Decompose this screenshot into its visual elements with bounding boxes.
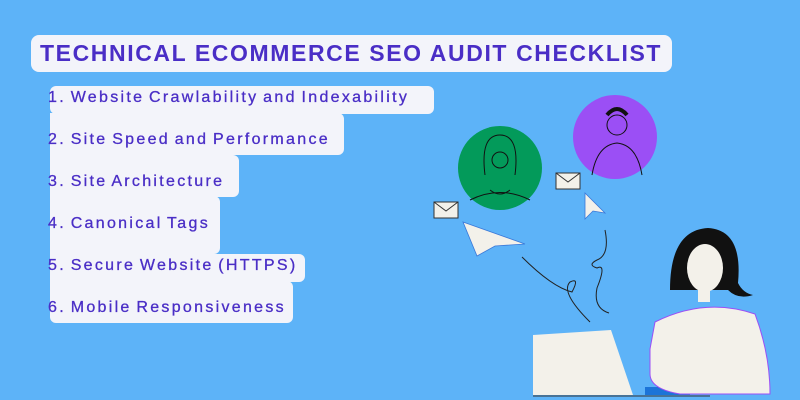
item 4: 4. Canonical Tags — [48, 215, 210, 232]
item 1: 1. Website Crawlability and Indexability — [48, 89, 409, 106]
item 3: 3. Site Architecture — [48, 173, 224, 190]
icon: laptop — [533, 330, 710, 396]
icon: green avatar — [458, 126, 542, 210]
title — [31, 35, 672, 72]
icon: envelope 1 — [434, 202, 458, 218]
icon: woman — [650, 228, 770, 394]
arrow: dashed flight paths — [522, 230, 609, 322]
checklist panel — [48, 86, 434, 323]
item 5: 5. Secure Website (HTTPS) — [48, 257, 297, 274]
icon: envelope 2 — [556, 173, 580, 189]
item 6: 6. Mobile Responsiveness — [48, 299, 286, 316]
icon: purple avatar — [573, 95, 657, 179]
item 2: 2. Site Speed and Performance — [48, 131, 330, 148]
icon: paper planes — [463, 193, 605, 256]
title: TECHNICAL ECOMMERCE SEO AUDIT CHECKLIST — [40, 40, 662, 66]
